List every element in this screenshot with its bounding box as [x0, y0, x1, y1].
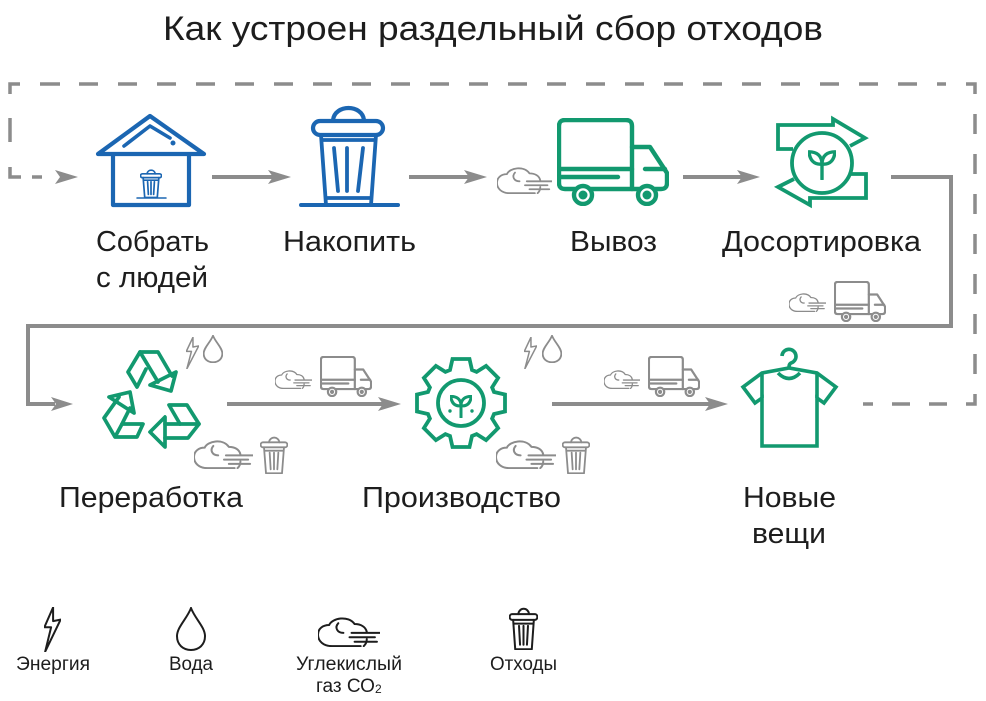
title: Как устроен раздельный сбор отходов: [163, 10, 823, 48]
legend item: energy: [16, 607, 90, 675]
dashed return loop arrow: [10, 84, 975, 404]
arrow: collect to store: [212, 170, 291, 184]
legend item: energy: Энергия: [16, 654, 90, 675]
text: collect: Собрать: [96, 226, 209, 258]
icon: waste and emission from production: [496, 438, 589, 473]
legend item: waste: [490, 609, 557, 675]
arrow: store to transport: [409, 170, 487, 184]
text: store: Накопить: [283, 226, 416, 258]
icon: cloud near truck: [497, 168, 552, 193]
icon: waste and emission from recycling: [194, 438, 287, 473]
icon: energy and water for production: [524, 336, 561, 369]
text: new things: вещи: [752, 518, 826, 550]
icon: sorting arrows: [778, 119, 866, 205]
legend item: carbon dioxide: Углекислый: [296, 654, 402, 675]
icon: house with bin: [98, 116, 204, 205]
text: production: Производство: [362, 482, 561, 514]
icon: production gear: [417, 359, 505, 447]
legend item: carbon dioxide: 2: [375, 682, 382, 696]
legend: [16, 607, 557, 697]
text: recycling: Переработка: [59, 482, 244, 514]
icon: green truck: [559, 120, 667, 204]
text: sorting: Досортировка: [722, 226, 922, 258]
arrow: production to new things: [552, 397, 728, 411]
icon: t-shirt on hanger: [743, 349, 836, 446]
solid connector from sorting to recycling: [28, 177, 951, 411]
arrow: recycling to production: [227, 397, 401, 411]
icon: truck with emission above connector: [789, 282, 885, 321]
legend item: carbon dioxide: газ СО: [316, 676, 375, 697]
icon: truck between recycling and production: [275, 357, 371, 396]
icon: recycling arrows: [104, 352, 199, 447]
text: transport: Вывоз: [570, 226, 657, 258]
legend item: carbon dioxide: [296, 618, 402, 697]
legend item: waste: Отходы: [490, 654, 557, 675]
icon: large trash bin: [301, 108, 398, 205]
legend item: water: [169, 608, 213, 675]
text: new things: Новые: [743, 482, 836, 514]
arrow: transport to sorting: [683, 170, 760, 184]
icon: energy and water for recycling: [186, 336, 222, 369]
text: collect: с людей: [96, 262, 208, 294]
legend item: water: Вода: [169, 654, 213, 675]
icon: truck between production and new things: [604, 357, 699, 396]
